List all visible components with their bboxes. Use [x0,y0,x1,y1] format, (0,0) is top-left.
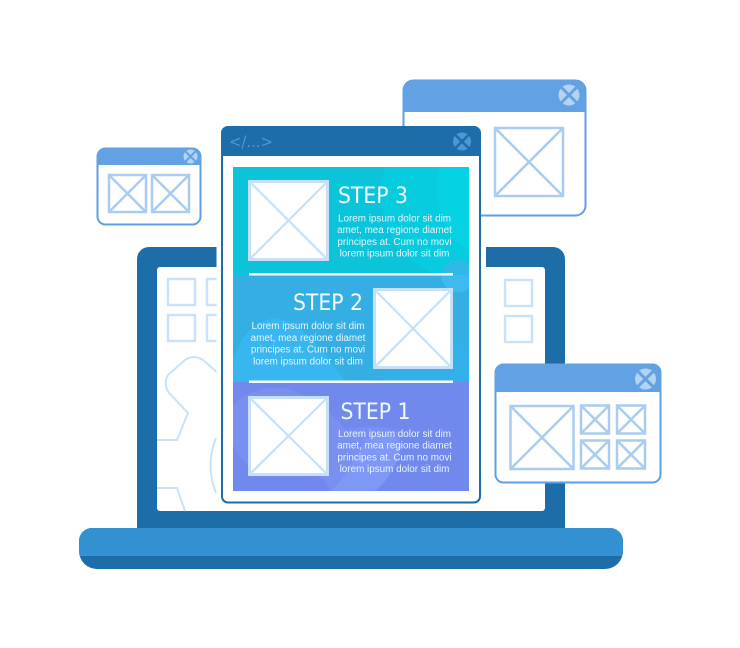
laptop lid [137,247,565,528]
window header [495,364,661,392]
floating window: top right [403,80,586,216]
main window [221,126,481,502]
close icon [635,368,656,390]
step 3 text: principes at. Cum no movi [337,237,452,248]
step 1 text: amet, mea regione diamet [337,440,452,452]
step 1 text [337,429,452,475]
panel: step 2 [233,273,469,382]
step 1 image placeholder [250,398,328,474]
step 3 text: lorem ipsum dolor sit dim [340,248,449,260]
close icon [184,150,198,164]
white halo behind main window [216,216,486,511]
window header [403,80,586,112]
step 1 text: Lorem ipsum dolor sit dim [338,429,451,440]
divider [249,380,453,383]
screen wireframe: squares [168,279,532,342]
step 1 text: principes at. Cum no movi [337,452,452,464]
divider [249,273,453,276]
step 2 text: amet, mea regione diamet [251,333,366,344]
image placeholder [495,128,563,196]
step 3 text: Lorem ipsum dolor sit dim [338,214,451,224]
screen wireframe: gear outline [157,357,218,511]
laptop screen [157,267,545,511]
step 1 heading: STEP 1 [340,400,410,425]
window header [97,148,201,165]
image placeholders [510,406,645,469]
floating window: right [495,364,661,482]
step 2 text [251,321,366,368]
laptop [79,247,623,569]
panel: step 3 [233,167,469,275]
step 1 text: lorem ipsum dolor sit dim [340,464,449,475]
code tag: </...> [229,132,273,151]
infographic illustration [79,80,662,569]
step 2 text: principes at. Cum no movi [251,344,365,356]
step 2 text: Lorem ipsum dolor sit dim [251,321,365,332]
step 2 text: lorem ipsum dolor sit dim [253,356,363,368]
panel: step 1 [233,380,469,491]
image placeholders [109,175,189,212]
close icon [558,84,580,106]
step 2 image placeholder [374,290,452,368]
step 3 heading: STEP 3 [338,184,408,209]
floating window: left small [97,148,201,224]
laptop base [79,528,623,569]
step 3 text [337,214,452,260]
main window header [221,126,481,156]
close icon [453,132,471,150]
step 2 heading: STEP 2 [293,291,363,316]
step 3 image placeholder [250,182,328,260]
step 3 text: amet, mea regione diamet [337,225,452,236]
